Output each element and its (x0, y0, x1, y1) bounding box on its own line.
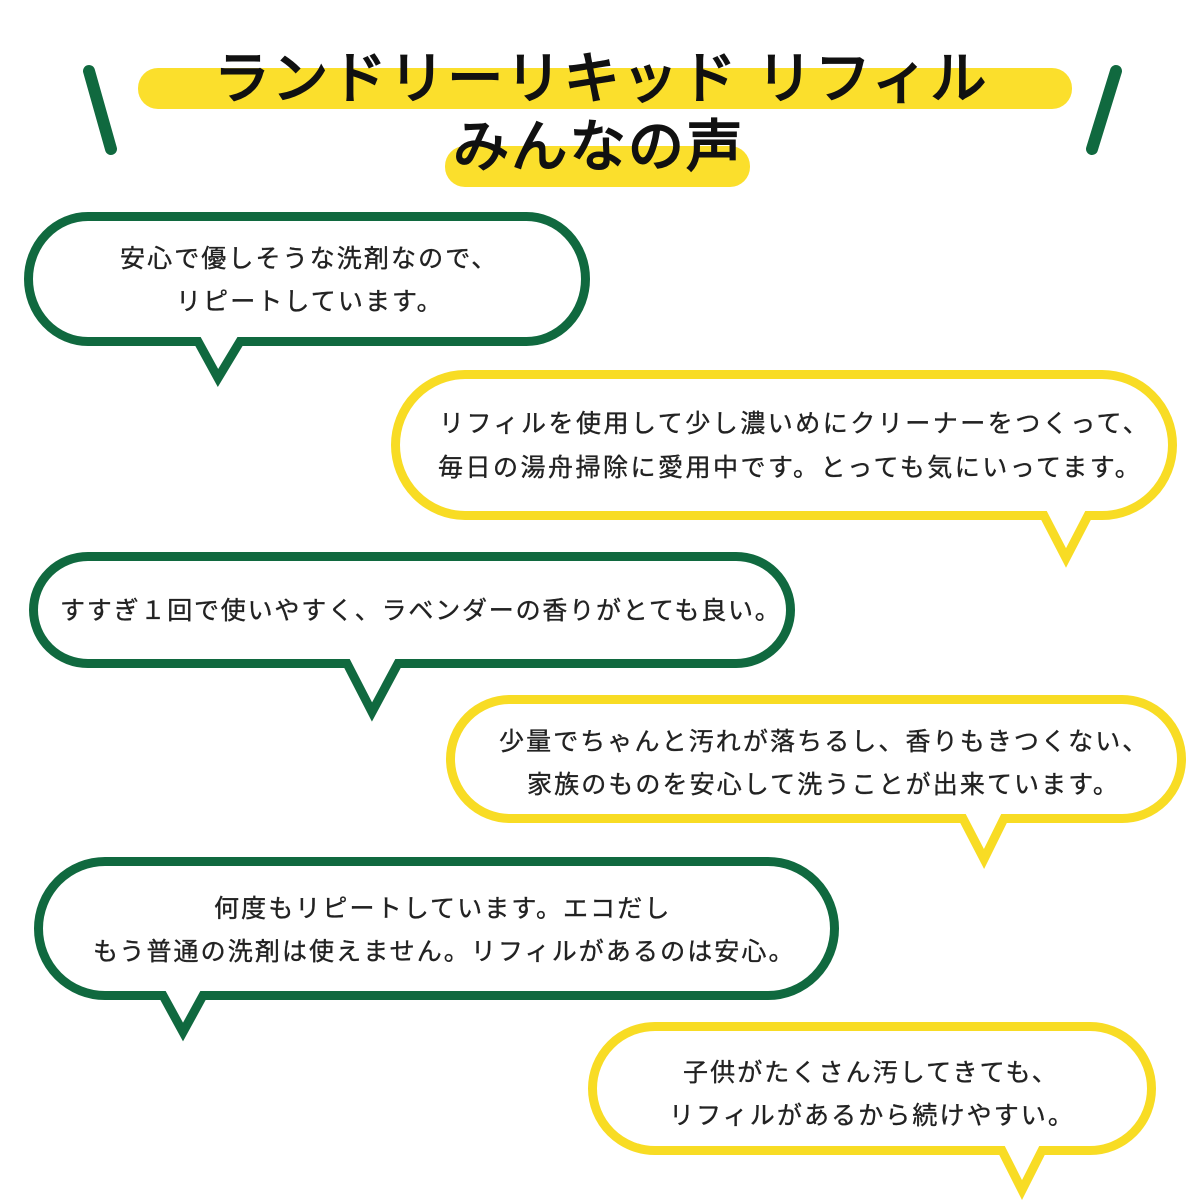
speech bubble 1 (green): リピートしています。 (176, 288, 444, 316)
title line 2: みんなの声 (453, 115, 744, 178)
bubble outline (395, 374, 1172, 558)
bubble text: リフィルを使用して少し濃いめにクリーナーをつくって、 (439, 410, 1150, 438)
bubble text: 安心で優しそうな洗剤なので、 (120, 245, 498, 273)
bubble text: 少量でちゃんと汚れが落ちるし、香りもきつくない、 (499, 728, 1149, 756)
title line 1: ランドリーリキッド リフィル (214, 47, 989, 110)
speech bubble 5 (green) (38, 862, 834, 1032)
speech bubble 4 (yellow) (450, 700, 1182, 859)
speech bubble 6 (yellow) (592, 1026, 1152, 1190)
speech bubble 3 (green) (34, 556, 790, 712)
speech bubble 1 (green) (28, 216, 586, 378)
speech bubble 4 (yellow): 家族のものを安心して洗うことが出来ています。 (527, 771, 1120, 799)
bubble text: 何度もリピートしています。エコだし (214, 895, 671, 923)
bubble text: 子供がたくさん汚してきても、 (683, 1059, 1059, 1087)
bubble text: すすぎ１回で使いやすく、ラベンダーの香りがとても良い。 (60, 597, 782, 625)
title highlight: second line (445, 146, 750, 187)
title highlight: first line (138, 68, 1072, 109)
bubble outline (38, 862, 834, 1032)
bubble outline (592, 1026, 1152, 1190)
bubble outline (34, 556, 790, 712)
title block (89, 47, 1116, 187)
bubble outline (28, 216, 586, 378)
left green accent stroke (89, 71, 111, 149)
speech bubble 6 (yellow): リフィルがあるから続けやすい。 (669, 1102, 1075, 1130)
speech bubble 5 (green): もう普通の洗剤は使えません。リフィルがあるのは安心。 (93, 938, 796, 966)
speech bubble 2 (yellow) (395, 374, 1172, 558)
speech bubble 2 (yellow): 毎日の湯舟掃除に愛用中です。とっても気にいってます。 (438, 454, 1142, 482)
bubble outline (450, 700, 1182, 859)
right green accent stroke (1092, 71, 1116, 149)
